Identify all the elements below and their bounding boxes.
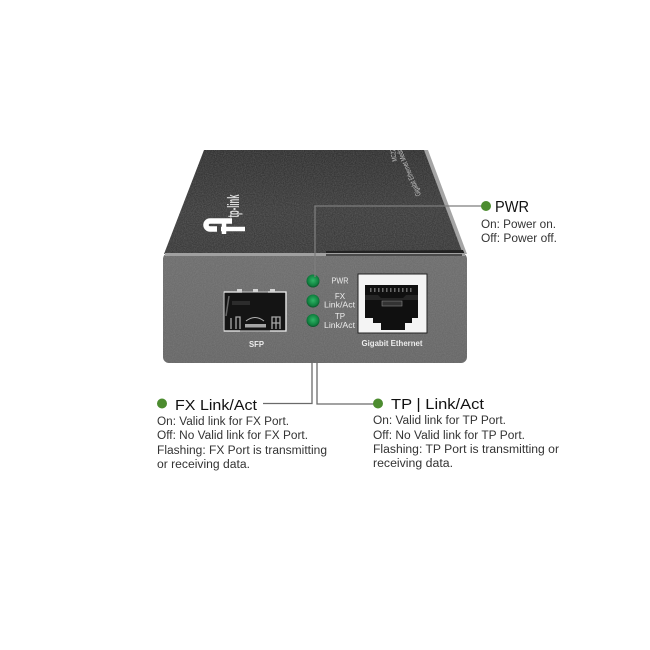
callout: TP Link/Act (373, 396, 559, 470)
description: or receiving data. (157, 459, 250, 471)
description: Flashing: FX Port is transmitting (157, 445, 327, 457)
LED labels: Link/Act (324, 321, 356, 330)
LED labels: FX (335, 292, 346, 301)
description: Off: No Valid link for TP Port. (373, 430, 525, 442)
LED labels (324, 276, 356, 330)
icon: tp-link logo (206, 194, 245, 234)
description (481, 219, 557, 245)
leader line: FX Link/Act (263, 363, 312, 404)
description: Off: No Valid link for FX Port. (157, 430, 308, 442)
dot (373, 398, 383, 408)
LED labels: Link/Act (324, 300, 356, 310)
model text on cover: MC220L (389, 143, 399, 162)
description: On: Valid link for TP Port. (373, 415, 506, 427)
infographic: media converter LED indicators (157, 150, 559, 470)
description: receiving data. (373, 458, 453, 470)
LED: PWR (306, 274, 320, 288)
LED: FX Link/Act (306, 294, 320, 308)
heading: TP | Link/Act (391, 396, 485, 413)
description (373, 415, 559, 470)
heading: FX Link/Act (175, 397, 258, 414)
LED labels: TP (335, 312, 345, 321)
leader line: PWR (315, 206, 482, 277)
dot (481, 201, 491, 211)
LED labels: PWR (332, 276, 349, 286)
heading: PWR (495, 199, 529, 216)
callout: PWR (481, 199, 557, 245)
device top cover (160, 150, 470, 257)
model text on cover: Gigabit Ethernet Media (394, 146, 423, 198)
LED: TP Link/Act (306, 314, 320, 327)
front panel (163, 253, 467, 363)
description (157, 416, 327, 471)
SFP port (224, 289, 286, 331)
device (160, 143, 470, 363)
RJ45 label: Gigabit Ethernet (362, 339, 423, 348)
description: On: Power on. (481, 219, 556, 231)
description: Off: Power off. (481, 233, 557, 245)
description: On: Valid link for FX Port. (157, 416, 289, 428)
callout: FX Link/Act (157, 397, 327, 471)
RJ45 port (358, 274, 427, 333)
device: tp-link (224, 194, 243, 218)
model text on cover (390, 150, 420, 196)
description: Flashing: TP Port is transmitting or (373, 444, 559, 456)
leader line: TP Link/Act (317, 363, 374, 404)
SFP label: SFP (249, 340, 265, 349)
dot (157, 398, 167, 408)
